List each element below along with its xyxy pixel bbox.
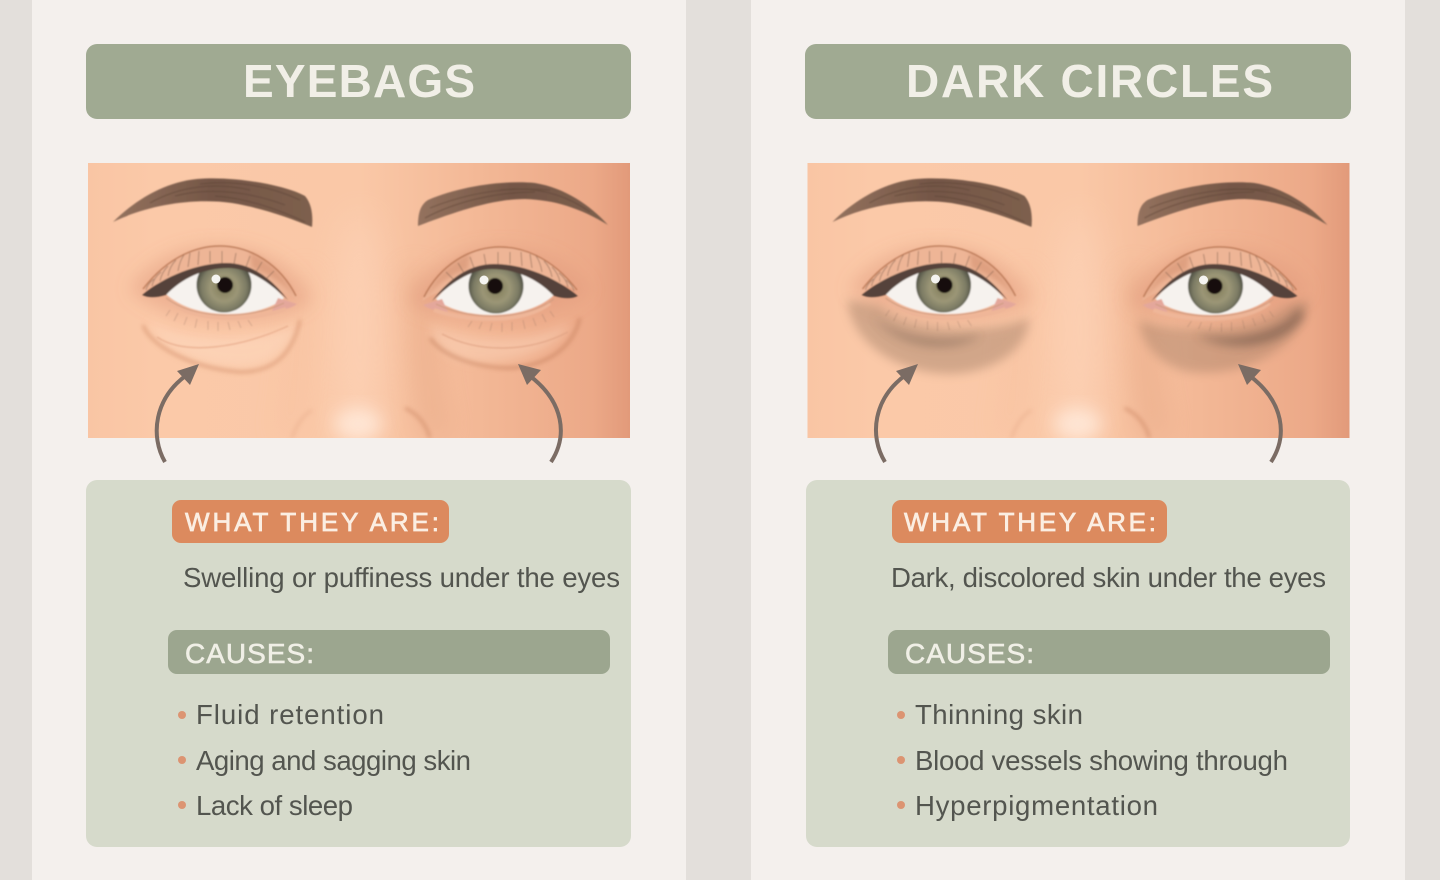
arrow: right eyebag: [518, 364, 561, 462]
heading: eyebags: EYEBAGS: [243, 55, 475, 107]
causes list: [178, 699, 471, 821]
heading: eyebags: [86, 44, 631, 119]
causes list: Fluid retention: [196, 699, 384, 730]
description: Dark, discolored skin under the eyes: [891, 562, 1326, 593]
causes list: Aging and sagging skin: [196, 745, 471, 776]
heading: dark circles: [805, 44, 1351, 119]
causes list: [897, 699, 1288, 821]
tag: what they are: WHAT THEY ARE:: [904, 507, 1156, 537]
causes list: Hyperpigmentation: [915, 790, 1158, 821]
panel: dark circles: [751, 0, 1405, 880]
illustration: eyes with puffy under-eye bags: [88, 163, 630, 450]
tag: what they are: [892, 500, 1167, 543]
tag: what they are: WHAT THEY ARE:: [185, 507, 439, 537]
causes bar: [888, 630, 1330, 674]
info panel: eyebags: [86, 480, 631, 847]
causes list: Blood vessels showing through: [915, 745, 1288, 776]
arrow: left eyebag: [157, 364, 199, 462]
causes bar: [168, 630, 610, 674]
panel: eyebags: [32, 0, 686, 880]
info panel: dark circles: [806, 480, 1350, 847]
illustration: eyes with dark under-eye circles: [808, 163, 1350, 450]
causes bar: CAUSES:: [185, 638, 314, 669]
causes list: Lack of sleep: [196, 790, 353, 821]
causes list: Thinning skin: [915, 699, 1083, 730]
heading: dark circles: DARK CIRCLES: [906, 55, 1273, 107]
tag: what they are: [172, 500, 449, 543]
description: Swelling or puffiness under the eyes: [183, 562, 620, 593]
arrow: left dark circle: [876, 364, 918, 462]
arrow: right dark circle: [1238, 364, 1281, 462]
causes bar: CAUSES:: [905, 638, 1034, 669]
